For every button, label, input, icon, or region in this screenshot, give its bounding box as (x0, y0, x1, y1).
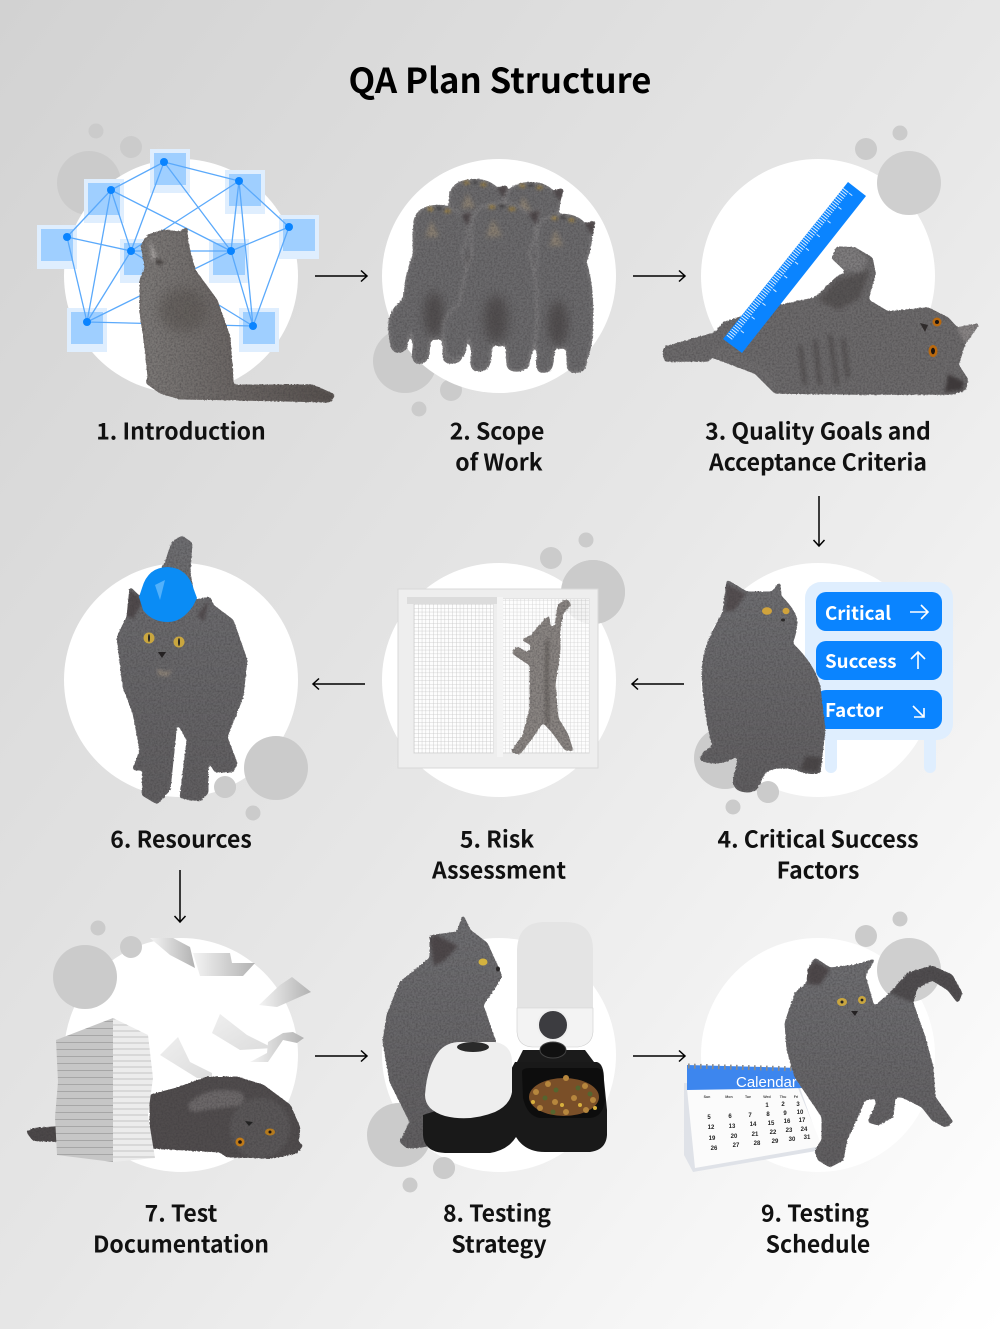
feeder hopper (517, 922, 593, 1047)
calendar title: Calendar (736, 1074, 797, 1091)
calendar dates: 19 (709, 1136, 716, 1142)
decorative circles 1 (57, 124, 142, 215)
flying papers (150, 938, 311, 1079)
climbing kitten (511, 599, 573, 754)
label 2: 2. Scope (450, 412, 544, 446)
label 2: of Work (455, 444, 543, 478)
button: success (816, 641, 942, 680)
big decorative circle 8 (367, 1103, 431, 1167)
lying cat (663, 247, 979, 394)
decorative circles 3 (855, 126, 908, 160)
standing cat (117, 536, 247, 804)
calendar dates (704, 1095, 811, 1152)
label 5: 5. Risk (460, 820, 534, 854)
white circle 6 (64, 563, 298, 797)
cat face 6 (144, 632, 184, 658)
icon: ruler (723, 182, 866, 353)
calendar dates: 2 (781, 1102, 785, 1108)
button: factor: Factor (825, 696, 884, 723)
group of five cats (389, 180, 595, 372)
sitting cat (700, 580, 825, 792)
calendar dates: 31 (804, 1135, 811, 1141)
white circle 5 (382, 563, 616, 797)
label 7: 7. Test (145, 1194, 218, 1228)
small decorative circle front 6 (214, 776, 236, 798)
cat from behind (140, 227, 335, 402)
white circle 4 (701, 563, 935, 797)
bowl with food (522, 1068, 605, 1118)
sitting cat (383, 915, 502, 1148)
icon: hard hat (139, 567, 197, 622)
calendar dates: 5 (707, 1115, 711, 1121)
arrow 6 to 7 (179, 870, 181, 922)
calendar dates: Mon (725, 1095, 733, 1099)
calendar dates: 1 (765, 1103, 769, 1109)
panel 2: scope of work (373, 159, 616, 478)
small decorative circle front 8 (433, 1157, 455, 1179)
calendar (684, 1065, 822, 1172)
calendar dates: 14 (750, 1122, 757, 1128)
big decorative circle 4 (694, 727, 756, 789)
label 8: Strategy (451, 1226, 547, 1260)
panel 1: introduction (37, 124, 335, 446)
white circle 7 (64, 938, 298, 1172)
decorative circles 6 (214, 776, 260, 820)
calendar dates: Sun (704, 1095, 710, 1099)
calendar dates: 24 (801, 1127, 808, 1133)
decorative circles 4 (726, 781, 779, 814)
paper stack (55, 1018, 155, 1162)
arrow 1 to 2 (315, 275, 367, 277)
title: QA Plan Structure (349, 53, 651, 103)
arrow 4 to 5 (632, 683, 684, 685)
label 3: Acceptance Criteria (708, 444, 927, 478)
panel 3: quality goals (663, 126, 979, 478)
label 8: 8. Testing (443, 1194, 551, 1228)
white dome (425, 1042, 512, 1118)
cat tail (26, 1126, 60, 1142)
calendar dates: 30 (789, 1137, 796, 1143)
calendar dates: 3 (796, 1102, 800, 1108)
decorative circle inside window (561, 560, 625, 624)
walking cat (785, 958, 962, 1167)
calendar dates: Tue (745, 1095, 751, 1099)
calendar dates: 12 (708, 1125, 715, 1131)
panel 8: testing strategy (367, 915, 616, 1260)
calendar dates: 27 (733, 1143, 740, 1149)
calendar dates: 22 (770, 1130, 777, 1136)
cat eye 8 (478, 958, 500, 972)
arrow 5 to 6 (313, 683, 365, 685)
decorative circles 5 (540, 532, 625, 624)
label 6: 6. Resources (110, 820, 252, 854)
label 7: Documentation (93, 1226, 269, 1260)
calendar dates: 7 (748, 1113, 752, 1119)
label 5: Assessment (431, 852, 566, 886)
arrow 3 to 4 (818, 496, 820, 546)
arrow 7 to 8 (315, 1055, 367, 1057)
calendar dates: 16 (784, 1119, 791, 1125)
calendar dates: 23 (786, 1128, 793, 1134)
feeder base (517, 1050, 594, 1066)
white circle 9 (701, 938, 935, 1172)
calendar dates: 26 (711, 1146, 718, 1152)
calendar dates: 13 (729, 1124, 736, 1130)
label 1: 1. Introduction (96, 412, 266, 446)
calendar dates: 28 (754, 1141, 761, 1147)
label 3: 3. Quality Goals and (705, 412, 931, 446)
panel 4: critical success factors (694, 563, 953, 886)
arrow 2 to 3 (633, 275, 685, 277)
big decorative circle 6 (244, 736, 308, 800)
calendar dates: Wed (763, 1095, 771, 1099)
decorative circles front 7 (53, 936, 142, 1009)
calendar dates: 15 (768, 1121, 775, 1127)
label 9: Schedule (766, 1226, 870, 1260)
small decorative circle front 4 (757, 781, 779, 803)
white circle 2 (382, 159, 616, 393)
button: critical: Critical (825, 599, 891, 626)
label 4: 4. Critical Success (718, 820, 918, 854)
panel 7: test documentation (26, 920, 311, 1260)
cat face 3 (920, 318, 942, 357)
pet feeder (423, 922, 607, 1153)
arrow 8 to 9 (633, 1055, 685, 1057)
decorative circles 8 (402, 1157, 455, 1192)
calendar dates: 29 (772, 1139, 779, 1145)
sign board (805, 582, 953, 773)
button: critical (816, 592, 942, 631)
cat face 9 (837, 996, 866, 1016)
decorative circles 7 (90, 920, 106, 936)
panel 5: risk assessment (382, 532, 625, 886)
cat front paw (712, 345, 775, 393)
panel 9: testing schedule (684, 912, 962, 1260)
decorative circles 2 (373, 329, 462, 416)
calendar dates: 21 (752, 1132, 759, 1138)
calendar dates: 9 (783, 1111, 787, 1117)
white circle 3 (701, 159, 935, 393)
calendar dates: Fri (794, 1095, 798, 1099)
white circle 8 (382, 938, 616, 1172)
white circle 1 (64, 159, 298, 393)
calendar dates: 17 (799, 1118, 806, 1124)
window frame (398, 589, 598, 768)
calendar dates: 8 (766, 1112, 770, 1118)
cat face 4 (762, 607, 790, 622)
panel 6: resources (64, 536, 308, 854)
decorative circles 9 (855, 912, 908, 947)
label 9: 9. Testing (761, 1194, 869, 1228)
button: success: Success (825, 647, 896, 674)
calendar dates: 6 (728, 1114, 732, 1120)
calendar dates: 10 (797, 1110, 804, 1116)
calendar dates: Thu (780, 1095, 786, 1099)
lying cat (150, 1077, 303, 1158)
big decorative circle 9 (877, 938, 941, 1002)
cat eyes 7 (236, 1121, 275, 1146)
big decorative circle 3 (877, 151, 941, 215)
icon: node network (37, 149, 319, 352)
button: factor (816, 690, 942, 729)
calendar dates: 20 (731, 1134, 738, 1140)
label 4: Factors (777, 852, 859, 886)
